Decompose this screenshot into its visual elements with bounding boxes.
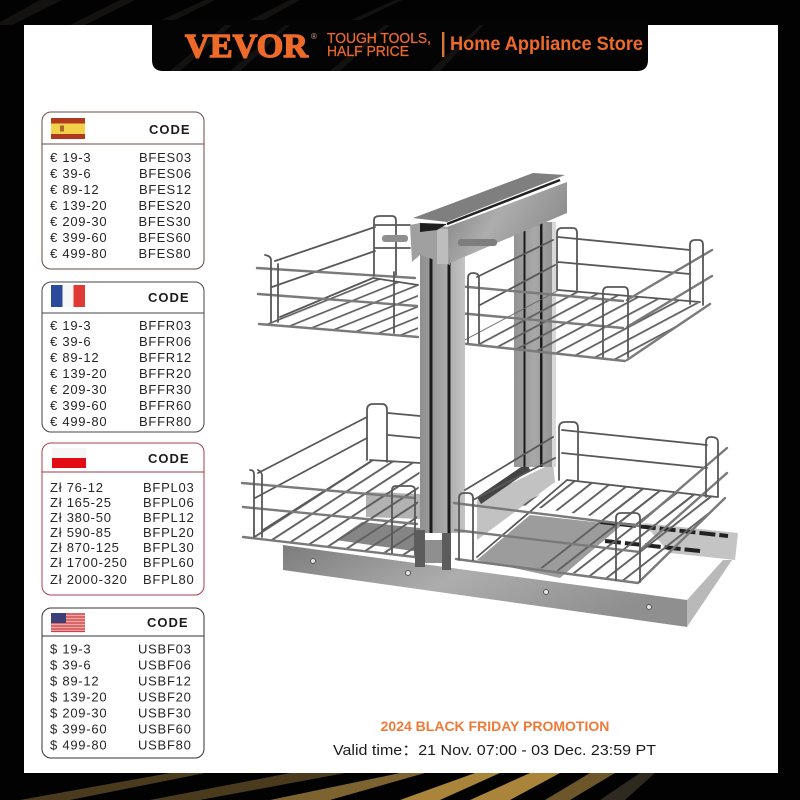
rows: France: € 39-6: [50, 334, 91, 349]
rows: Spain: BFES80: [138, 246, 191, 261]
rows: USA: USBF60: [138, 722, 192, 736]
rows: Spain: BFES06: [139, 166, 192, 181]
rows: USA: USBF06: [138, 658, 192, 672]
rows: France: € 89-12: [50, 350, 99, 365]
rows: USA: USBF20: [138, 690, 192, 704]
rows: USA: $ 19-3: [50, 642, 91, 656]
heading: code: CODE: [149, 122, 191, 137]
basket: bottom left: [242, 404, 420, 557]
icon: Poland flag: [52, 448, 86, 468]
rows: Spain: [50, 150, 192, 261]
rows: Poland: Zł 2000-320: [50, 572, 128, 587]
rows: Spain: € 19-3: [50, 150, 91, 165]
rows: France: € 209-30: [50, 382, 107, 397]
rows: Spain: BFES12: [139, 182, 192, 197]
rows: Spain: BFES30: [138, 214, 191, 229]
validity note: Valid time：21 Nov. 07:00 - 03 Dec. 23:59 PT: [333, 742, 656, 759]
divider: [442, 32, 444, 57]
rows: Spain: € 399-60: [50, 230, 107, 245]
rows: USA: $ 139-20: [50, 690, 107, 704]
rows: France: € 19-3: [50, 318, 91, 333]
rows: France: BFFR30: [139, 382, 192, 397]
panel: France codes: [42, 282, 204, 432]
store name: Home Appliance Store: [450, 34, 643, 55]
icon: France flag: [51, 285, 85, 307]
panel: Poland codes: [42, 443, 204, 595]
rows: USA: USBF03: [138, 642, 192, 656]
promotion title: 2024 BLACK FRIDAY PROMOTION: [381, 718, 609, 734]
rows: USA: $ 209-30: [50, 706, 107, 720]
feet: [415, 530, 451, 570]
top beam side: [447, 182, 567, 263]
rows: France: [50, 318, 192, 429]
rows: Poland: BFPL03: [143, 480, 194, 495]
rows: Poland: Zł 76-12: [50, 480, 104, 495]
rows: Spain: BFES03: [139, 150, 192, 165]
top beam plate: [413, 173, 565, 222]
rows: USA: USBF80: [138, 738, 192, 752]
rows: France: BFFR20: [139, 366, 192, 381]
slogan: TOUGH TOOLS,: [327, 31, 431, 47]
rows: Poland: BFPL20: [143, 525, 194, 540]
rows: Poland: BFPL80: [143, 572, 194, 587]
slogan: HALF PRICE: [327, 44, 409, 60]
icon: Spain flag: [51, 118, 85, 139]
basket: top left: [257, 216, 418, 337]
heading: code: CODE: [148, 451, 190, 466]
rows: USA: USBF30: [138, 706, 192, 720]
product: corner pull-out basket organizer: [242, 173, 738, 627]
rows: Poland: BFPL06: [143, 495, 194, 510]
rows: France: BFFR03: [139, 318, 192, 333]
registered mark: ®: [311, 32, 317, 41]
rows: Spain: € 89-12: [50, 182, 99, 197]
rows: France: BFFR80: [139, 414, 192, 429]
icon: USA flag: [51, 613, 85, 632]
basket: bottom right: [454, 422, 727, 583]
panel: Spain codes: [42, 112, 204, 269]
rows: Poland: Zł 1700-250: [50, 555, 128, 570]
rows: Poland: BFPL12: [143, 510, 194, 525]
rows: France: € 399-60: [50, 398, 107, 413]
rows: France: € 499-80: [50, 414, 107, 429]
rows: Spain: BFES60: [138, 230, 191, 245]
front column: [420, 255, 465, 533]
base frame: [283, 463, 738, 627]
rows: Poland: Zł 380-50: [50, 510, 112, 525]
rows: Poland: [50, 480, 194, 587]
rows: Poland: Zł 870-125: [50, 540, 120, 555]
rows: Spain: € 209-30: [50, 214, 107, 229]
rows: Spain: € 499-80: [50, 246, 107, 261]
rows: USA: USBF12: [138, 674, 192, 688]
heading: code: CODE: [147, 615, 189, 630]
main column with top beam: [382, 173, 567, 570]
logo: VEVOR: VEVOR: [185, 28, 308, 65]
rows: Poland: BFPL60: [143, 555, 194, 570]
rows: Spain: BFES20: [138, 198, 191, 213]
rows: Poland: Zł 590-85: [50, 525, 112, 540]
rows: USA: $ 39-6: [50, 658, 91, 672]
slogan: [327, 31, 431, 60]
rows: Poland: Zł 165-25: [50, 495, 112, 510]
heading: code: CODE: [148, 290, 190, 305]
rod: right: [458, 239, 497, 246]
corner block: [410, 223, 450, 265]
rows: USA: $ 399-60: [50, 722, 107, 736]
rows: France: € 139-20: [50, 366, 107, 381]
basket: top right: [457, 228, 712, 361]
rows: Spain: € 39-6: [50, 166, 91, 181]
rows: USA: [50, 642, 192, 752]
rows: USA: $ 89-12: [50, 674, 99, 688]
rows: France: BFFR12: [139, 350, 192, 365]
rows: USA: $ 499-80: [50, 738, 107, 752]
panel: USA codes: [42, 608, 204, 758]
rod: left: [382, 235, 408, 242]
rows: France: BFFR06: [139, 334, 192, 349]
rows: Poland: BFPL30: [143, 540, 194, 555]
rear column: [514, 222, 556, 467]
header banner: [152, 20, 648, 71]
rows: Spain: € 139-20: [50, 198, 107, 213]
rows: France: BFFR60: [139, 398, 192, 413]
